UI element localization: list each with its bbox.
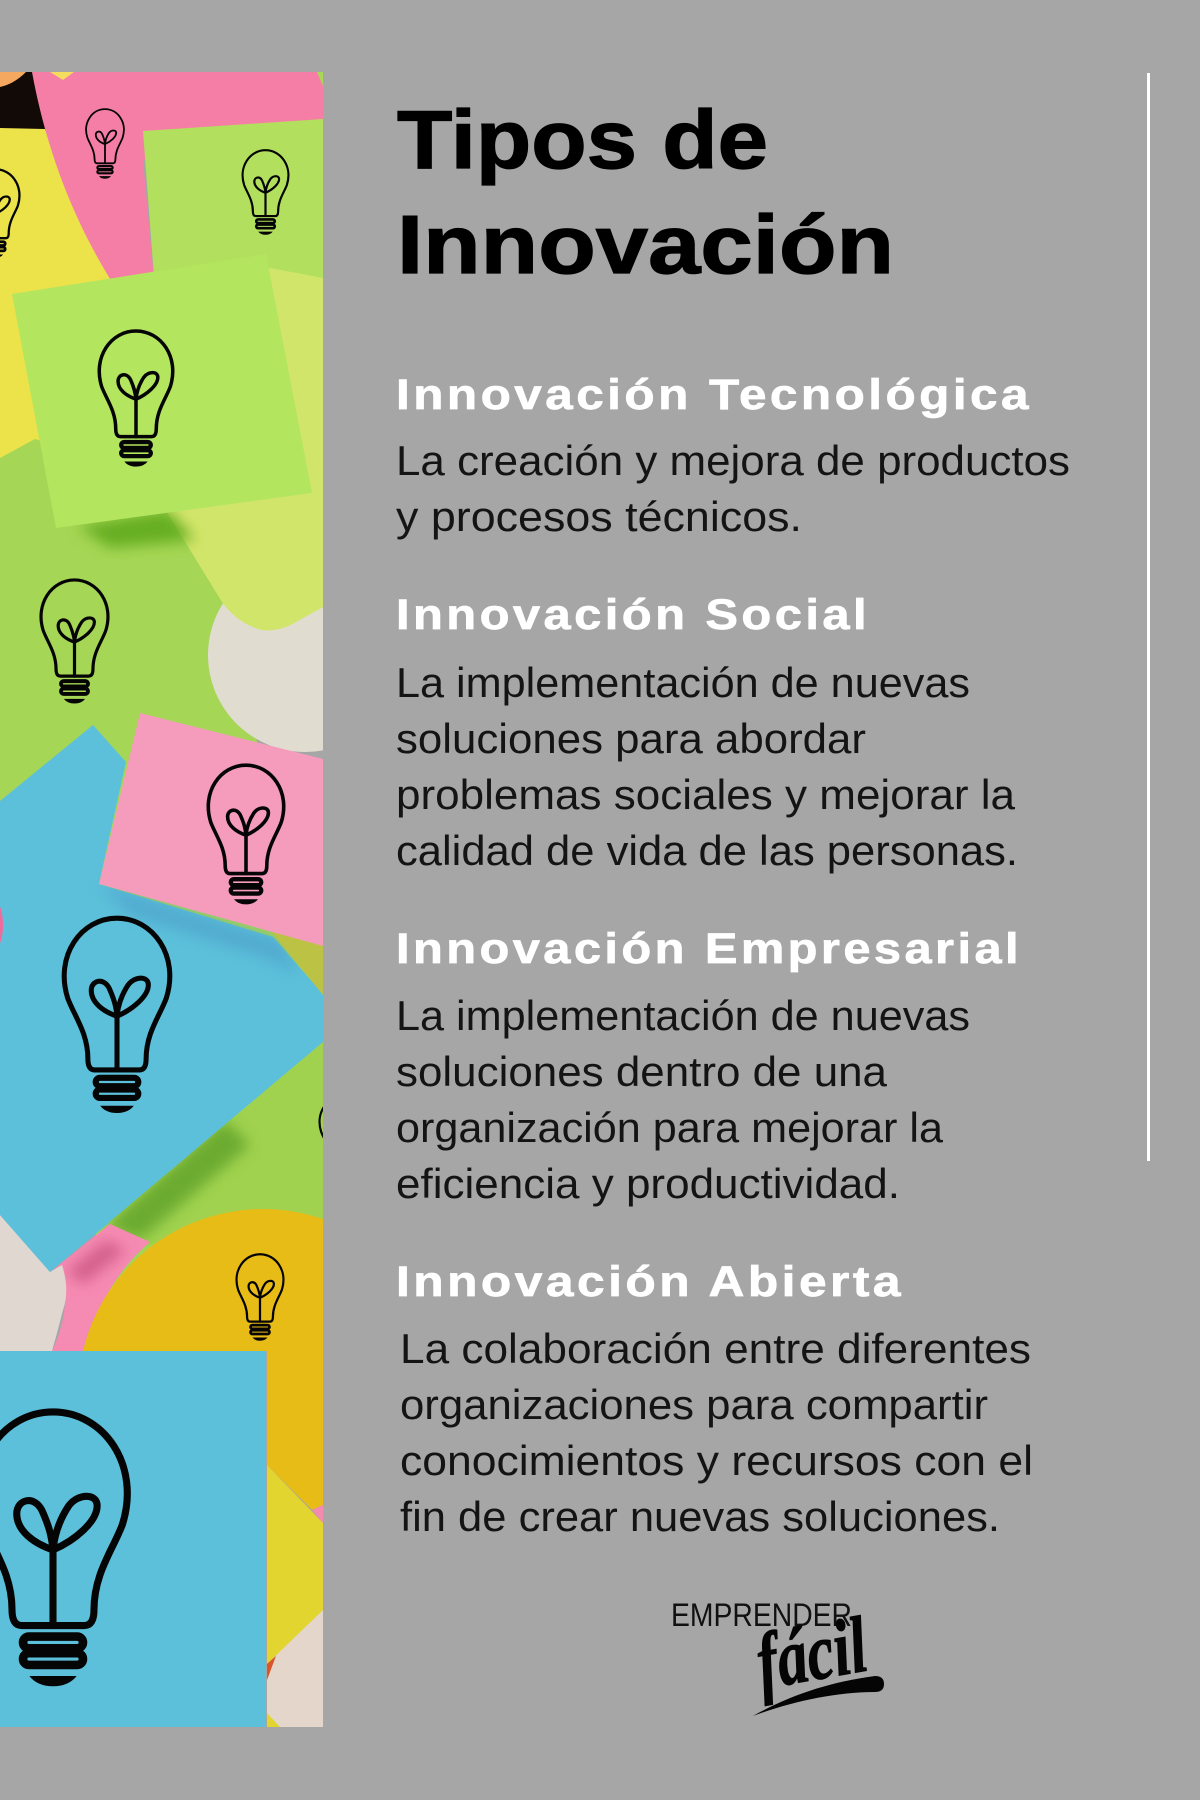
light yellow note	[267, 1465, 323, 1664]
description: conocimientos y recursos con el	[400, 1437, 1033, 1484]
small green corner	[317, 72, 323, 86]
description: organización para mejorar la	[396, 1104, 944, 1151]
description	[400, 1325, 1033, 1540]
description: La creación y mejora de productos	[396, 437, 1070, 484]
blue note lower	[0, 1351, 266, 1727]
big green note	[12, 254, 312, 528]
orange sliver	[267, 1656, 276, 1680]
heading: Innovación Abierta	[396, 1258, 904, 1306]
yellow circle	[83, 1209, 323, 1510]
description: soluciones para abordar	[396, 715, 866, 762]
heading: Innovación Social	[396, 591, 870, 639]
description	[396, 437, 1070, 540]
yellow scrap under pink note	[270, 930, 323, 995]
logo: Emprender Fácil	[671, 1597, 884, 1716]
icon: bulb on top green note	[243, 150, 288, 235]
logo swoosh	[753, 1676, 884, 1716]
lower green note	[110, 1040, 323, 1245]
icon: bulb on medium green note	[41, 580, 108, 703]
icon: bulb on blue note	[64, 918, 170, 1113]
title	[397, 93, 894, 291]
logo wordmark: EMPRENDER	[671, 1597, 852, 1633]
icon: bulb on yellow circle	[237, 1254, 283, 1341]
blue note upper tip	[0, 1215, 110, 1272]
heading: Innovación Empresarial	[396, 925, 1022, 973]
section: Innovación Empresarial	[396, 925, 1022, 1207]
small pink corner	[312, 1505, 323, 1523]
medium green note	[0, 439, 323, 1300]
orange note corner	[0, 72, 26, 87]
icon: bulb on big green note	[99, 331, 173, 467]
title: Innovación	[397, 198, 894, 291]
yellow sliver bottom	[267, 1713, 280, 1727]
description	[396, 992, 970, 1207]
description: organizaciones para compartir	[400, 1381, 988, 1428]
pink note middle	[99, 713, 323, 946]
pale yellow rounded note	[168, 268, 323, 630]
icon: bulb on top pink note	[86, 109, 124, 179]
beige circle	[208, 604, 323, 752]
section: Innovación Tecnológica	[396, 371, 1070, 540]
dark backdrop corner	[0, 72, 46, 132]
description: La implementación de nuevas	[396, 992, 970, 1039]
description: eficiencia y productividad.	[396, 1160, 900, 1207]
shadow under green note	[78, 510, 195, 548]
heading: Innovación Tecnológica	[396, 371, 1032, 419]
pink note top	[32, 72, 323, 290]
description	[396, 659, 1018, 874]
icon: bulb on lower blue note	[0, 1412, 127, 1686]
logo script: fácil	[750, 1601, 874, 1707]
description: fin de crear nuevas soluciones.	[400, 1493, 1000, 1540]
description: y procesos técnicos.	[396, 493, 802, 540]
pink circle edge	[0, 906, 3, 944]
description: La colaboración entre diferentes	[400, 1325, 1031, 1372]
icon: bulb on pink note	[208, 765, 284, 904]
green note top right	[143, 119, 323, 290]
pink band	[50, 1224, 150, 1351]
icon: bulb cut at right edge	[318, 1106, 323, 1138]
cream note bottom right	[267, 1605, 323, 1727]
section: Innovación Abierta	[396, 1258, 1033, 1540]
blue note upper	[0, 725, 323, 1272]
panel: sticky notes photo	[0, 72, 323, 1727]
white vertical rule	[1147, 73, 1150, 1161]
icon: bulb cut on yellow note	[0, 169, 19, 258]
shadow of pink note on blue	[108, 886, 300, 969]
description: La implementación de nuevas	[396, 659, 970, 706]
shadow on lower green	[105, 1120, 250, 1240]
description: calidad de vida de las personas.	[396, 827, 1018, 874]
description: problemas sociales y mejorar la	[396, 771, 1016, 818]
description: soluciones dentro de una	[396, 1048, 888, 1095]
pink band shadow	[66, 1240, 126, 1284]
small yellow scrap	[50, 72, 74, 80]
title: Tipos de	[397, 93, 768, 186]
yellow note	[0, 128, 110, 458]
section: Innovación Social	[396, 591, 1018, 874]
cream circle lower left	[0, 1215, 66, 1351]
